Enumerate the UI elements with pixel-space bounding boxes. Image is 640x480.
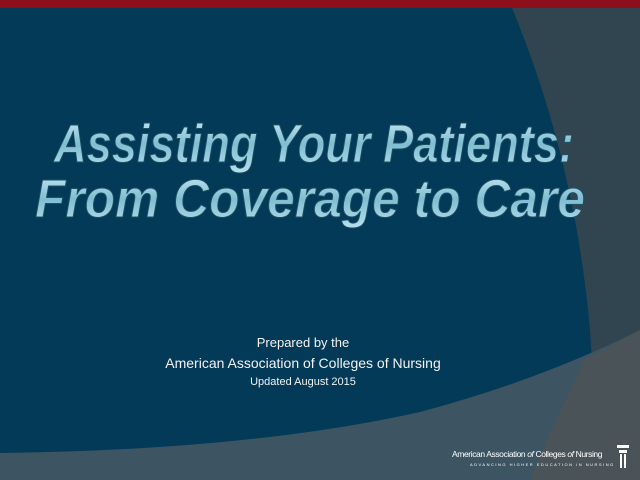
icon: column <box>617 445 629 468</box>
subtitle block: Updated August 2015 <box>250 376 356 388</box>
logo <box>452 445 629 468</box>
subtitle block <box>165 335 441 388</box>
title: From Coverage to Care <box>35 169 585 229</box>
logo: American Association of Colleges of Nursing <box>452 449 602 459</box>
title <box>35 114 585 229</box>
subtitle block: Prepared by the <box>257 335 349 350</box>
top red bar <box>0 0 640 8</box>
logo: ADVANCING HIGHER EDUCATION IN NURSING <box>470 462 615 467</box>
subtitle block: American Association of Colleges of Nursing <box>165 355 441 371</box>
